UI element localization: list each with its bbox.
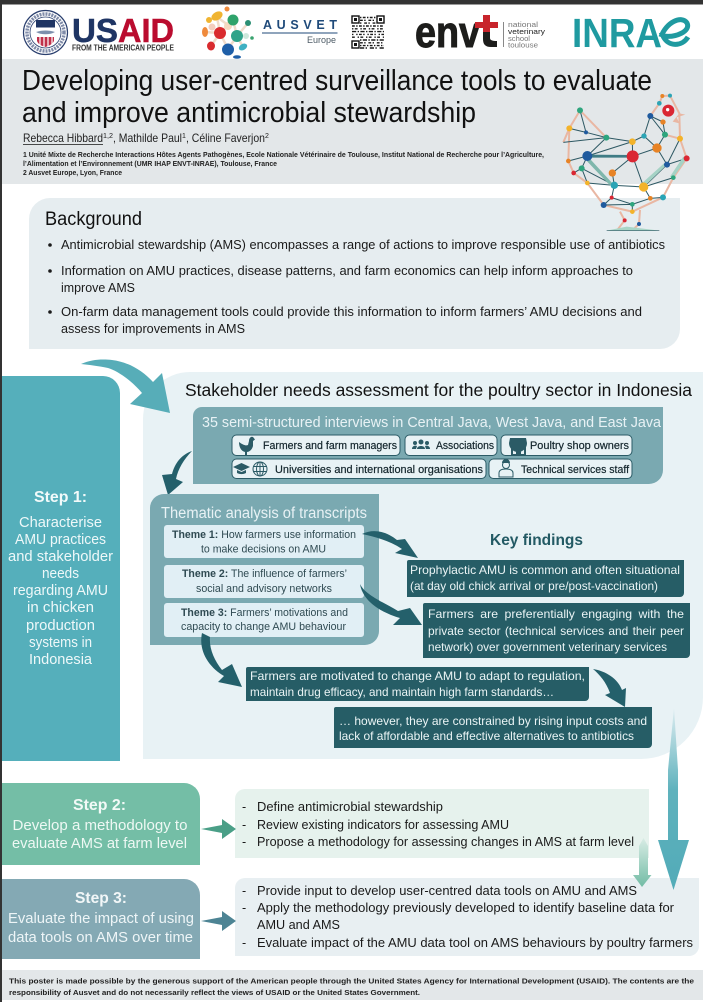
- stakeholder: farmers: [232, 435, 400, 456]
- logo: USAID: FROM THE AMERICAN PEOPLE: [72, 44, 174, 52]
- step 1 description: regarding AMU: [13, 583, 108, 599]
- logo: USAID: AID: [118, 12, 174, 49]
- step 1 description: Indonesia: [29, 652, 93, 668]
- affiliations: 2 Ausvet Europe, Lyon, France: [23, 170, 122, 177]
- arrow: small down arrow from step 2 to step 3: [633, 838, 652, 887]
- authors: , Céline Faverjon: [186, 131, 265, 145]
- finding 2: [423, 603, 690, 658]
- logo: INRAE: INRA: [572, 10, 662, 56]
- footer disclaimer: [2, 970, 703, 1000]
- panel: step 3 actions: -: [242, 884, 246, 898]
- finding 3: Farmers are motivated to change AMU to adapt to regulation,: [250, 669, 585, 683]
- theme 3: [164, 603, 364, 637]
- finding 1: [407, 560, 684, 597]
- stakeholder: technical services staff: Technical services staff: [521, 464, 630, 476]
- theme 2: [164, 565, 364, 598]
- arrow: theme 2 to finding 2: [360, 584, 422, 625]
- authors: 2: [265, 133, 269, 140]
- logo: ENVT: env: [415, 7, 481, 56]
- thematic heading: Thematic analysis of transcripts: [161, 505, 367, 522]
- finding 4: lack of affordable and effective alternatives to antibiotics: [339, 729, 634, 743]
- panel: step 2 actions: Review existing indicators for assessing AMU: [257, 818, 509, 832]
- stakeholder: technical services staff: [489, 459, 632, 478]
- step 3 description: Evaluate the impact of using: [8, 910, 194, 927]
- heading: key findings: Key findings: [490, 532, 583, 549]
- QR code: [352, 16, 384, 48]
- panel: step 1: [2, 376, 120, 761]
- step 2 description: evaluate AMS at farm level: [12, 835, 187, 852]
- finding 4: [334, 707, 652, 748]
- theme 1: Theme 1: How farmers use information: [172, 529, 356, 541]
- theme 2: Theme 2: The influence of farmers’: [182, 568, 347, 580]
- bullet list: Information on AMU practices, disease patterns, and farm economics can help inform approaches to: [61, 264, 633, 278]
- authors: Rebecca Hibbard: [23, 131, 103, 145]
- logo: ENVT: toulouse: [508, 40, 538, 50]
- arrow: step 3 to actions: [201, 911, 236, 931]
- panel: step 3 actions: AMU and AMS: [257, 918, 340, 932]
- heading: step 2: Step 2:: [73, 797, 126, 814]
- arrow: step 2 to actions: [201, 819, 236, 839]
- step 1 description: production: [26, 618, 95, 634]
- panel: step 2 actions: Define antimicrobial stewardship: [257, 800, 443, 814]
- title: [22, 65, 652, 129]
- logo: Ausvet Europe: [202, 6, 338, 59]
- stakeholder: poultry shop owners: Poultry shop owners: [530, 440, 630, 452]
- panel: step 2 actions: Propose a methodology for assessing changes in AMS at farm level: [257, 835, 634, 849]
- panel: step 3: [2, 879, 200, 959]
- arrow: background to stakeholder assessment: [81, 359, 170, 413]
- step 3 description: [8, 910, 194, 946]
- authors: 1,2: [103, 133, 113, 140]
- bullet list: [48, 238, 665, 336]
- finding 1: (at day old chick arrival or pre/post-vaccination): [410, 579, 658, 593]
- panel: step 2 actions: -: [242, 835, 246, 849]
- panel: step 3 actions: [235, 878, 699, 956]
- bullet list: assess for improvements in AMS: [61, 322, 245, 336]
- step 1 description: [8, 515, 113, 668]
- step 2 description: [12, 817, 188, 852]
- heading: step 1: Step 1:: [34, 489, 87, 506]
- logo: USAID: US: [72, 12, 118, 49]
- step 1 description: AMU practices: [15, 532, 106, 548]
- theme 1: [164, 525, 364, 558]
- finding 1: Prophylactic AMU is common and often situational: [410, 563, 680, 577]
- stakeholder: universities: Universities and international organisations: [275, 464, 484, 476]
- authors: 1: [182, 133, 186, 140]
- theme 2: social and advisory networks: [196, 583, 332, 595]
- step 1 description: and stakeholder: [8, 549, 113, 565]
- panel: step 3 actions: Evaluate impact of the AMU data tool on AMS behaviours by poultry farmers: [257, 936, 693, 950]
- logo: ENVT: [415, 7, 545, 56]
- panel: interviews: [193, 407, 663, 484]
- step 3 description: data tools on AMS over time: [8, 929, 193, 946]
- footer disclaimer: responsibility of Ausvet and do not necessarily reflect the views of USAID or the United States Government.: [9, 988, 420, 997]
- footer disclaimer: This poster is made possible by the generous support of the American people through the United States Agency for International Development (USAID). The contents are the: [9, 976, 695, 986]
- panel: step 2 actions: -: [242, 800, 246, 814]
- heading: stakeholder needs assessment: Stakeholder needs assessment for the poultry sector in Indonesia: [185, 380, 692, 400]
- panel: step 3 actions: -: [242, 901, 246, 915]
- arrow: interviews to thematic analysis: [162, 451, 192, 495]
- panel: step 3 actions: Apply the methodology previously developed to identify baseline data for: [257, 901, 674, 915]
- panel: background: [29, 198, 680, 349]
- bullet list: improve AMS: [61, 281, 135, 295]
- theme 3: Theme 3: Farmers’ motivations and: [181, 607, 348, 619]
- bullet list: Antimicrobial stewardship (AMS) encompasses a range of actions to improve responsible use of antibiotics: [61, 238, 665, 252]
- title: Developing user-centred surveillance tools to evaluate: [22, 65, 652, 97]
- finding 3: [246, 667, 589, 701]
- affiliations: 1 Unité Mixte de Recherche Interactions Hôtes Agents Pathogènes, Ecole Nationale Vétérinaire de Toulouse, Institut National de Recherche pour l’Agriculture,: [23, 152, 544, 159]
- stakeholder: universities: [232, 459, 486, 478]
- logo: ENVT: national: [508, 20, 538, 29]
- step 1 description: in chicken: [27, 600, 94, 616]
- step 1 description: needs: [42, 566, 79, 582]
- finding 3: maintain drug efficacy, and maintain high farm standards…: [250, 685, 554, 699]
- authors: [23, 131, 269, 145]
- step 1 description: systems in: [29, 635, 92, 651]
- bullet list: On-farm data management tools could provide this information to inform farmers’ AMU decisions and: [61, 305, 642, 319]
- header band: [2, 59, 703, 184]
- logo: ENVT: veterinary: [508, 27, 545, 36]
- finding 2: private sector (technical services and their peer: [428, 624, 684, 638]
- stakeholder: farmers: Farmers and farm managers: [263, 440, 398, 452]
- step 1 description: Characterise: [19, 515, 102, 531]
- theme 1: to make decisions on AMU: [201, 544, 326, 556]
- stakeholder: associations: Associations: [436, 440, 495, 452]
- affiliations: [23, 152, 544, 177]
- logo: Ausvet Europe: AUSVET: [263, 18, 337, 32]
- panel: step 3 actions: -: [242, 936, 246, 950]
- theme 3: capacity to change AMU behaviour: [181, 621, 346, 633]
- panel: step 2 actions: [235, 789, 649, 858]
- finding 4: … however, they are constrained by rising input costs and: [339, 714, 647, 728]
- panel: step 2 actions: -: [242, 818, 246, 832]
- heading: background: Background: [45, 209, 142, 230]
- authors: , Mathilde Paul: [113, 131, 182, 145]
- stakeholder: associations: [405, 435, 497, 456]
- step 2 description: Develop a methodology to: [12, 817, 188, 834]
- logo: USAID: [24, 10, 174, 54]
- panel: thematic analysis: [150, 494, 379, 645]
- arrow: theme 1 to finding 1: [362, 531, 418, 558]
- title: and improve antimicrobial stewardship: [22, 97, 476, 129]
- affiliations: l’Alimentation et l’Environnement (UMR IHAP ENVT-INRAE), Toulouse, France: [23, 161, 277, 168]
- panel: step 3 actions: Provide input to develop user-centred data tools on AMU and AMS: [257, 884, 637, 898]
- icon: networked chicken: [563, 94, 690, 231]
- arrow: finding 3 to finding 4: [593, 669, 626, 707]
- finding 2: Farmers are preferentially engaging with the: [428, 607, 684, 621]
- arrow: theme 3 to finding 3: [201, 633, 242, 687]
- arrow: large down arrow to step 3: [658, 708, 689, 890]
- stakeholder: poultry shop owners: [501, 435, 632, 456]
- finding 2: network) over government veterinary services: [428, 640, 667, 654]
- interviews heading: 35 semi-structured interviews in Central Java, West Java, and East Java: [202, 414, 662, 431]
- panel: stakeholder needs assessment: [143, 372, 703, 759]
- heading: step 3: Step 3:: [75, 890, 127, 907]
- logo: ENVT: school: [508, 34, 530, 43]
- panel: step 2: [2, 783, 200, 865]
- logo: Ausvet Europe: Europe: [307, 35, 336, 45]
